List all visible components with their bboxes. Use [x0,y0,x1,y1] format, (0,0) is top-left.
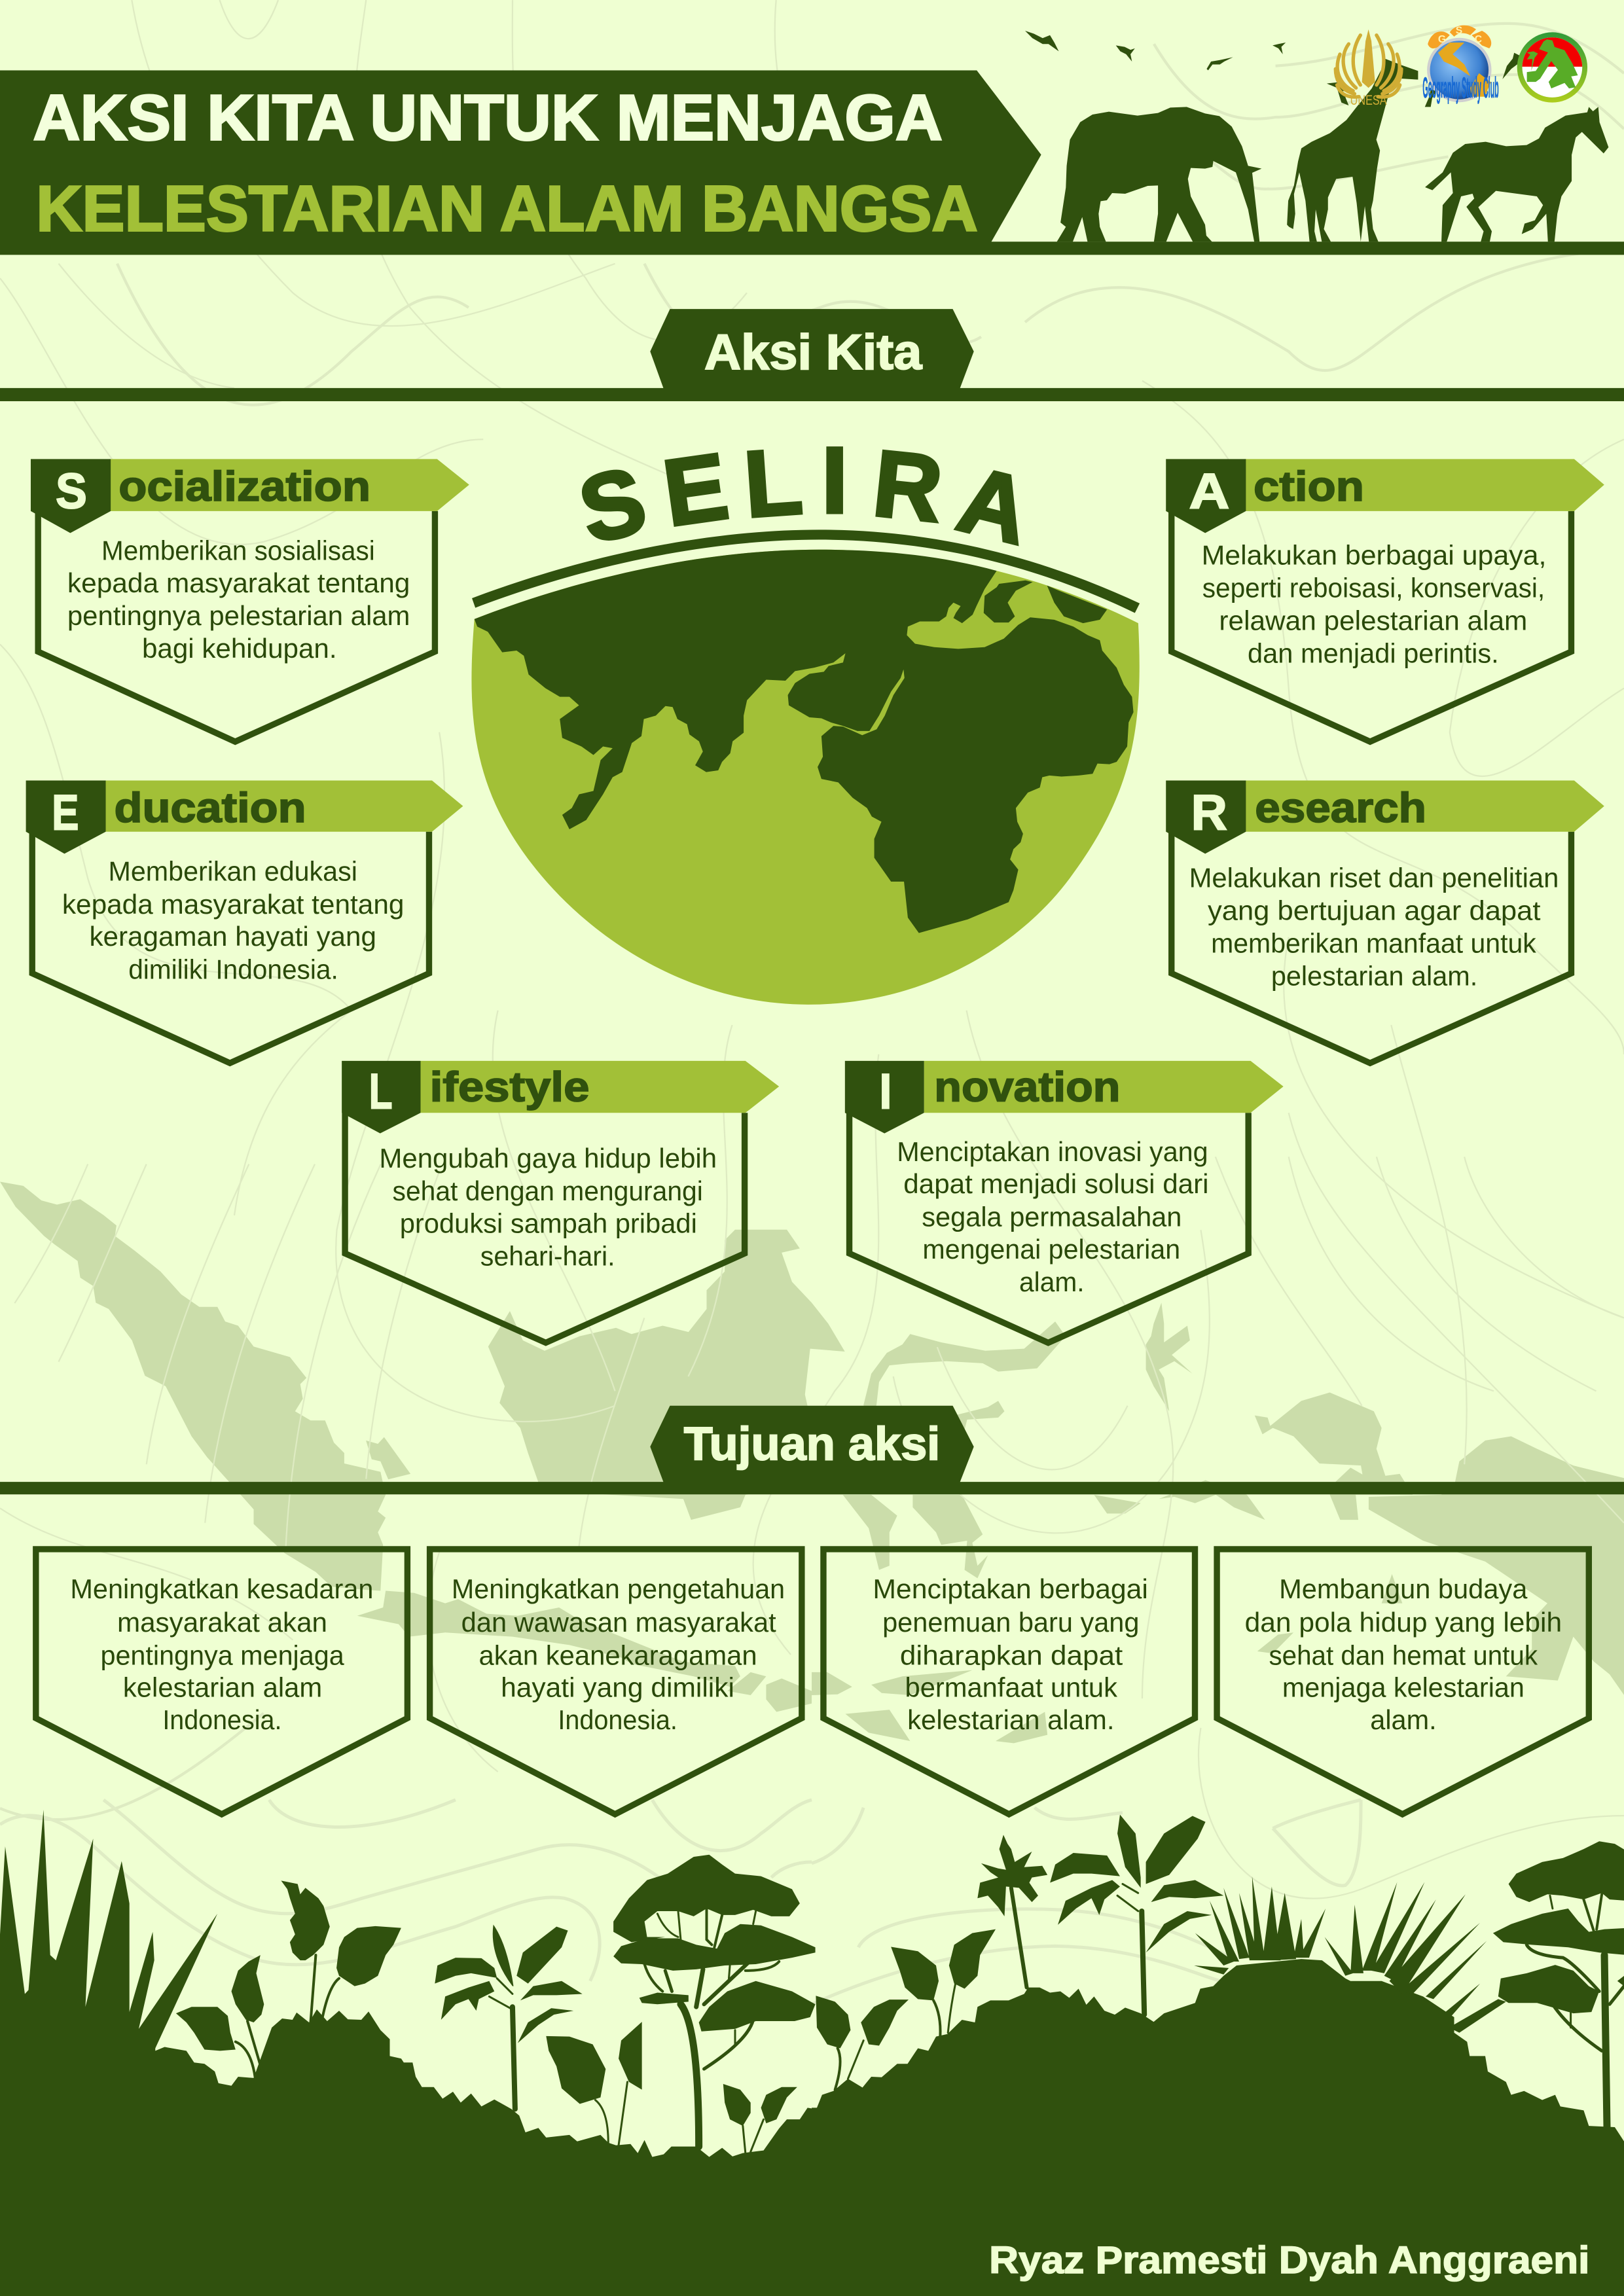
map of Indonesia [0,1181,1624,1743]
goal card 2: akan keanekaragaman [479,1640,757,1670]
jungle silhouette [0,1810,1624,2296]
description: keragaman hayati yang [89,922,376,952]
banner shape [0,70,1624,255]
SELIRA lettering [569,428,1039,564]
SELIRA lettering: R [869,431,947,542]
description: yang bertujuan agar dapat [1208,895,1541,925]
heading: novation [934,1063,1120,1110]
card outline [1172,832,1571,1063]
goal card 4: alam. [1370,1705,1437,1735]
card: Research: R [1191,785,1227,840]
logo: UNESA [1335,29,1401,108]
description: sehat dengan mengurangi [393,1176,703,1206]
letter tag [845,1061,924,1134]
SELIRA lettering: E [657,434,734,546]
logo: Geography Study Club: S [1456,26,1462,37]
heading: ocialization [118,463,370,510]
letter tag [31,459,111,533]
card: Lifestyle: L [369,1064,393,1120]
card outline [1172,511,1571,742]
description: Melakukan berbagai upaya, [1202,541,1546,571]
goal card 1 [36,1549,407,1814]
description: dapat menjadi solusi dari [903,1169,1209,1199]
icon: birds [1025,31,1529,107]
section heading: Aksi Kita: Aksi Kita [704,325,922,380]
heading: esearch [1255,784,1426,831]
Jawa [357,1591,740,1687]
description: produksi sampah pribadi [400,1209,697,1239]
Bangka island [366,1437,410,1479]
SELIRA lettering: S [569,447,656,564]
description [62,856,404,984]
card: Education [26,780,463,1063]
Nusa Tenggara [812,1670,1047,1743]
leaves and canopies left [176,1855,816,2126]
description [1189,863,1559,991]
heading ribbon [110,459,469,511]
card outline [32,832,429,1063]
Bali [727,1672,812,1712]
description: relawan pelestarian alam [1219,605,1527,636]
card outline [850,1113,1248,1343]
description [1202,541,1546,668]
goal card 4: Membangun budaya [1279,1574,1528,1604]
icon: elephant [1057,107,1261,242]
heading: ction [1254,463,1364,510]
globe continents [475,550,1134,933]
SELIRA lettering: L [741,429,805,537]
SELIRA lettering: A [948,446,1039,564]
goal card 2: hayati yang dimiliki [501,1673,734,1703]
Sumatra [0,1181,386,1591]
section heading: Aksi Kita [0,309,1624,401]
description: Mengubah gaya hidup lebih [379,1143,717,1174]
card: Socialization [31,459,469,742]
goal card 3: Menciptakan berbagai [873,1574,1148,1604]
description: segala permasalahan [922,1202,1182,1232]
description: alam. [1019,1267,1085,1297]
Papua [1257,1437,1624,1695]
heading ribbon [1245,780,1604,832]
goal card 1: pentingnya menjaga [100,1640,345,1670]
jungle right half [812,1815,1624,2296]
globe ocean [471,550,1140,1005]
plant stems right [835,1884,1624,2127]
goal card 3: kelestarian alam. [907,1705,1114,1735]
goal card 2: Meningkatkan pengetahuan [452,1574,785,1604]
description: Menciptakan inovasi yang [897,1137,1208,1167]
title banner [0,70,1624,255]
goal card 3: bermanfaat untuk [905,1673,1117,1703]
description [379,1143,717,1272]
description: Memberikan edukasi [109,856,357,886]
description: dimiliki Indonesia. [128,954,338,984]
goal card 3 [823,1549,1195,1814]
title line 1: AKSI KITA UNTUK MENJAGA [33,81,943,153]
card: Socialization: S [56,463,87,519]
description [897,1137,1209,1297]
card: Innovation: I [879,1064,892,1120]
goal card 2: Indonesia. [558,1705,677,1735]
card: Action: A [1189,463,1229,519]
logo: UNESA: UNESA [1350,92,1387,108]
heading ribbon [1245,459,1604,511]
Kalimantan [488,1230,845,1520]
goal card 1: masyarakat akan [117,1607,327,1638]
globe with SELIRA [471,428,1140,1005]
leaves, palm and agave right [816,1815,1624,2048]
description: pentingnya pelestarian alam [67,601,410,631]
heading ribbon [924,1061,1284,1113]
title line 2: KELESTARIAN ALAM BANGSA [36,172,978,244]
logo: Geography Study Club [1422,26,1499,104]
letter tag [26,780,106,853]
logo: Geography Study Club: C [1475,34,1482,45]
description: memberikan manfaat untuk [1211,929,1536,959]
icon: giraffe [1287,59,1418,242]
section heading: Tujuan aksi [0,1406,1624,1494]
ground and hill [812,1959,1624,2296]
author name: Ryaz Pramesti Dyah Anggraeni [989,2239,1589,2282]
goal card 4: dan pola hidup yang lebih [1245,1607,1562,1638]
goal card 3: penemuan baru yang [882,1607,1140,1638]
goal card 4 [1217,1549,1589,1814]
Sulawesi [843,1321,1066,1578]
logo: Geography Study Club: G [1438,34,1446,45]
card: Research [1166,780,1604,1063]
goal card 4: menjaga kelestarian [1282,1673,1525,1703]
description: seperti reboisasi, konservasi, [1202,573,1545,603]
description: mengenai pelestarian [922,1234,1180,1265]
heading ribbon [105,780,463,832]
plant stems left [236,1909,779,2153]
goal card 1: Indonesia. [162,1705,281,1735]
goal card 4: sehat dan hemat untuk [1269,1640,1538,1670]
description: pelestarian alam. [1271,961,1477,991]
card: Lifestyle [342,1061,779,1343]
SELIRA lettering: I [821,428,848,533]
heading: ifestyle [430,1063,589,1110]
logo: green circle with flag [1517,32,1587,103]
jungle left half [0,1810,816,2296]
description: bagi kehidupan. [142,634,337,664]
heading ribbon [420,1061,779,1113]
description: Memberikan sosialisasi [101,536,375,566]
icon: horse [1425,107,1608,242]
goal card 1: Meningkatkan kesadaran [70,1574,373,1604]
section heading: Tujuan aksi: Tujuan aksi [684,1418,940,1471]
card: Education: E [52,785,79,840]
description: dan menjadi perintis. [1248,638,1499,668]
goal card 2: dan wawasan masyarakat [461,1607,776,1638]
letter tag [1166,459,1246,533]
card outline [345,1113,745,1343]
Seram and Maluku islands [1094,1393,1413,1520]
card outline [38,511,435,742]
description [67,536,410,664]
description: Melakukan riset dan penelitian [1189,863,1559,893]
letter tag [342,1061,421,1134]
arc above globe [472,529,1140,613]
card: Action [1166,459,1604,742]
description: sehari-hari. [480,1242,615,1272]
card: Innovation [845,1061,1284,1343]
heading: ducation [114,784,306,831]
ground, grass and hill [0,1810,816,2296]
goal card 3: diharapkan dapat [900,1640,1123,1670]
goal card 1: kelestarian alam [123,1673,322,1703]
goal card 2 [430,1549,802,1814]
description: kepada masyarakat tentang [67,568,410,598]
letter tag [1166,780,1246,853]
Halmahera [1146,1302,1193,1411]
description: kepada masyarakat tentang [62,889,404,920]
